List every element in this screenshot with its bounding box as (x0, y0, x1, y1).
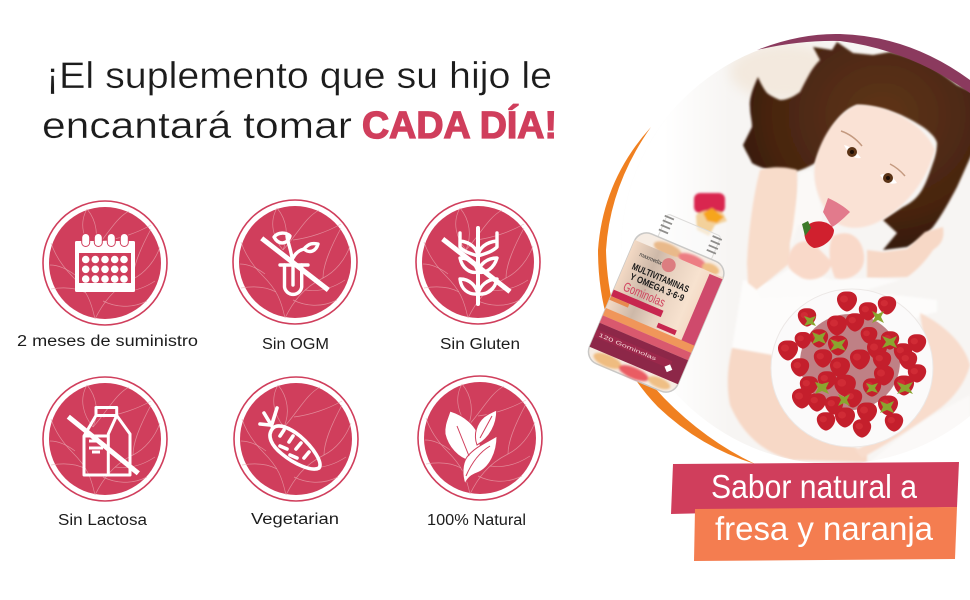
badge: 2 meses de suministro (17, 201, 198, 350)
badge: Vegetarian (234, 377, 358, 528)
banner: Sabor natural a: Sabor natural a (711, 468, 918, 505)
label: MULTIVITAMINAS (630, 261, 691, 295)
badge: Sin Lactosa (43, 377, 167, 529)
label: 100% Natural (427, 512, 526, 529)
banner: fresa y naranja (694, 507, 957, 561)
lower body: arms and legs (728, 313, 970, 462)
girl: face (814, 105, 935, 228)
label: Y OMEGA 3·6·9 (628, 271, 686, 304)
strawberries (778, 291, 926, 438)
icon: milk carton crossed out (68, 408, 138, 475)
badge: Sin OGM (233, 200, 357, 353)
badge: 100% Natural (418, 376, 542, 529)
label: 2 meses de suministro (17, 333, 198, 350)
arc: purple (757, 34, 970, 93)
product: gummy bottle (584, 167, 754, 396)
title (42, 55, 557, 147)
icon: calendar (75, 234, 135, 292)
label: Vegetarian (251, 511, 339, 528)
label: 120 Gominolas (598, 333, 657, 363)
gummies inside (591, 233, 722, 393)
icon: plant in test tube crossed out (262, 233, 328, 294)
banner: Sabor natural a (671, 462, 959, 514)
plate (771, 289, 933, 447)
badge: Sin Gluten (416, 200, 540, 353)
bedding (709, 41, 970, 463)
jar body (584, 229, 728, 396)
strawberry leaves (804, 311, 913, 413)
photo: girl eating strawberries (709, 41, 970, 463)
girl: white top below hands (758, 278, 878, 290)
title: CADA DÍA! (362, 103, 557, 147)
label (590, 240, 723, 384)
label: maxmedix (638, 252, 663, 267)
label: Gominolas (621, 279, 668, 310)
hair (743, 42, 970, 250)
girl: eyes and mouth (823, 131, 905, 227)
label: Sin Gluten (440, 336, 520, 353)
label: Sin Lactosa (58, 512, 147, 529)
girl: forearm right (867, 227, 943, 278)
title: encantará tomar (42, 105, 352, 146)
girl: hands (788, 233, 864, 280)
icon: leaves (445, 410, 497, 484)
girl: white tank top (790, 188, 800, 240)
label: Sin OGM (262, 336, 329, 353)
lower body: shirt (732, 280, 937, 356)
gummies floating above (694, 193, 727, 236)
arc: orange (598, 127, 755, 464)
jar neck (657, 214, 721, 262)
banner: fresa y naranja: fresa y naranja (715, 510, 934, 547)
girl: arm and shoulder (747, 167, 798, 290)
icon: wheat crossed out (443, 228, 510, 304)
title: ¡El suplemento que su hijo le (46, 55, 552, 96)
strawberry held (802, 221, 834, 248)
icon: carrot (260, 408, 320, 469)
